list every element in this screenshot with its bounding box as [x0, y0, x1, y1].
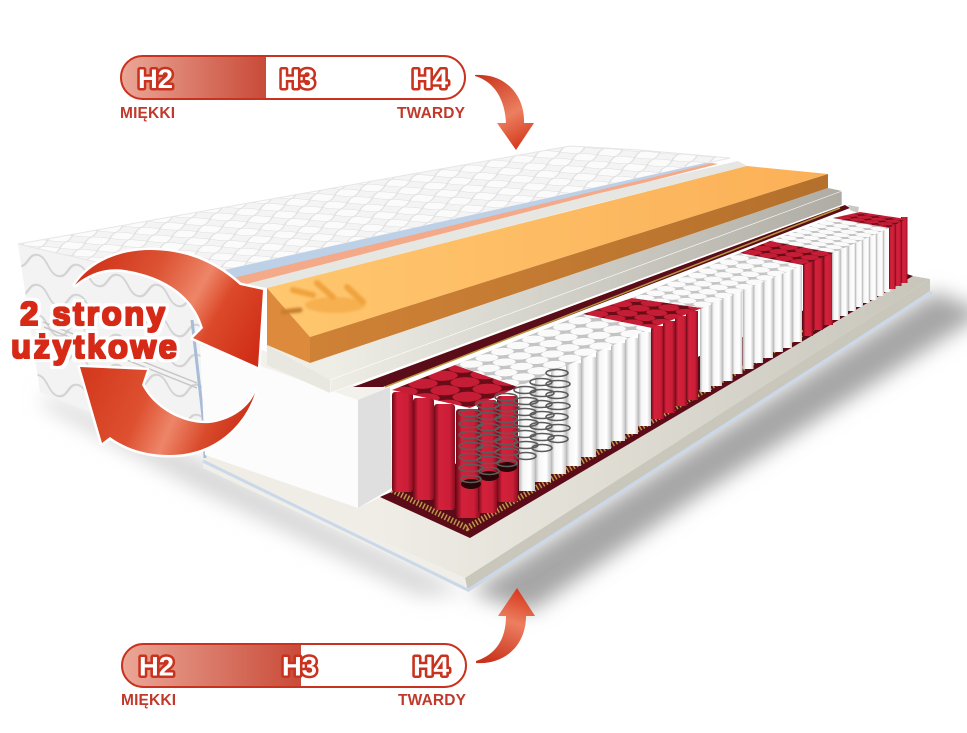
- salmon layer: [233, 163, 718, 285]
- label hard: TWARDY: [397, 105, 466, 122]
- red pockets section 4: [889, 217, 908, 289]
- arrow: rotate bottom: [80, 367, 255, 455]
- firmness scale top: [120, 56, 466, 122]
- floor shadow left: [40, 392, 465, 596]
- bar fill: [122, 644, 301, 687]
- pocket tops red 1: [392, 365, 518, 408]
- red pockets section 3: [803, 251, 833, 336]
- pocket tops red 3: [740, 241, 833, 265]
- pocket tops white 3: [770, 218, 889, 253]
- mattress illustration: [18, 146, 967, 612]
- label soft: MIĘKKI: [120, 105, 175, 122]
- exposed steel springs: [459, 370, 570, 482]
- grey layer front: [330, 191, 842, 393]
- pocket tops white 1: [455, 314, 652, 387]
- callout: two usable sides: użytkowe: [11, 328, 177, 365]
- bar fill: [122, 56, 266, 99]
- label H3: H3: [282, 652, 317, 682]
- callout: two usable sides: [11, 295, 177, 365]
- grey layer top: [267, 188, 842, 380]
- floor shadow right: [470, 292, 967, 612]
- arrow: rotate top: [75, 250, 263, 367]
- quilted side panel: [18, 244, 215, 458]
- label H4: H4: [412, 64, 448, 94]
- block top: [200, 345, 388, 400]
- label H2: H2: [138, 64, 173, 94]
- callout: two usable sides: 2 strony: [20, 295, 166, 332]
- white core block: [200, 345, 358, 508]
- label H2: H2: [139, 652, 174, 682]
- label H3: H3: [280, 64, 315, 94]
- maroon floor: [380, 270, 913, 538]
- base plate left side: [203, 462, 468, 592]
- bar outline: [121, 56, 465, 99]
- maroon back strip: [353, 205, 850, 387]
- blue layer: [225, 163, 712, 279]
- orange foam top: [267, 166, 828, 337]
- arrow: bottom scale to bottom layer: [476, 588, 535, 663]
- gold back line: [385, 208, 840, 387]
- base plate: [203, 276, 930, 578]
- pocket cut openings: [461, 462, 517, 489]
- corner seam: [192, 320, 205, 458]
- quilted top cover: [18, 146, 730, 285]
- white pockets section 3: [832, 226, 891, 320]
- pocket tops red 4: [833, 212, 906, 228]
- blue trim line: [203, 292, 932, 590]
- hand imprint: [283, 283, 365, 313]
- pocket tops red 2: [583, 298, 702, 328]
- grey layer end: [267, 345, 330, 393]
- label soft: MIĘKKI: [121, 692, 176, 709]
- red pockets near end: [392, 392, 518, 518]
- base plate side: [465, 279, 930, 592]
- bar outline: [122, 644, 466, 687]
- red pockets section 2: [651, 311, 698, 419]
- terry layer: [243, 161, 747, 288]
- side zipper band: [43, 322, 197, 388]
- label hard: TWARDY: [398, 692, 467, 709]
- firmness scale bottom: [121, 644, 467, 709]
- floor hatch: [392, 280, 895, 528]
- orange foam side: [310, 174, 828, 363]
- white pockets section 1: [519, 332, 651, 491]
- arrow: top scale to top layer: [475, 75, 534, 150]
- pocket tops white 2: [632, 253, 803, 308]
- block side: [358, 387, 392, 508]
- orange foam end: [267, 288, 310, 363]
- grey far tab: [848, 205, 859, 213]
- white pockets section 2: [700, 265, 802, 392]
- label H4: H4: [413, 652, 449, 682]
